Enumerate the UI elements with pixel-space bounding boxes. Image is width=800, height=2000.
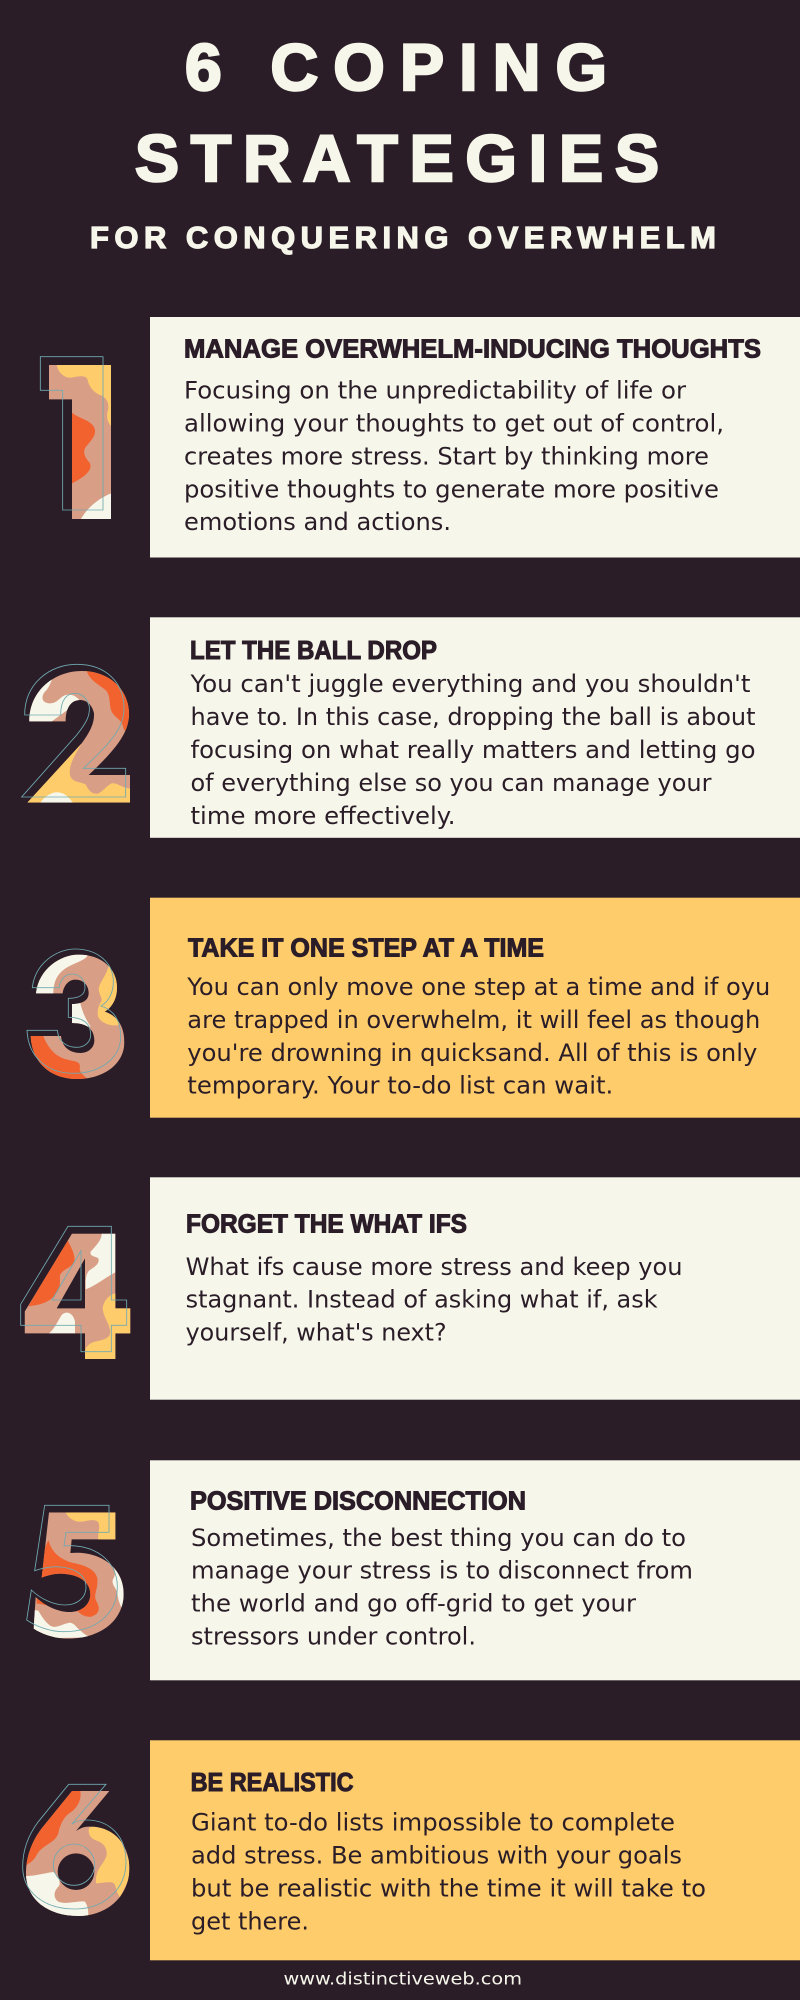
body text: strategy 6 [191, 1809, 706, 1936]
panel: strategy 3 [150, 898, 800, 1118]
body text: strategy 6: get there. [191, 1908, 309, 1936]
panel: strategy 1 [150, 317, 800, 558]
heading: strategy 1: MANAGE OVERWHELM-INDUCING THOUGHTS [184, 336, 761, 364]
body text: strategy 3: you're drowning in quicksand. All of this is only [187, 1039, 757, 1067]
numeral 5 [27, 1505, 130, 1643]
body text: strategy 5: Sometimes, the best thing you can do to [191, 1524, 686, 1552]
title [135, 30, 659, 195]
heading: strategy 2: LET THE BALL DROP [190, 637, 437, 665]
subtitle: FOR CONQUERING OVERWHELM [90, 220, 716, 255]
body text: strategy 4: yourself, what's next? [186, 1319, 447, 1347]
numeral 4 [20, 1226, 135, 1363]
numeral 2 [20, 664, 137, 807]
body text: strategy 5: the world and go off-grid to get your [191, 1590, 636, 1618]
numeral 1 [40, 356, 111, 519]
body text: strategy 3 [186, 973, 770, 1100]
body text: strategy 2 [189, 670, 755, 830]
body text: strategy 6: add stress. Be ambitious with your goals [191, 1842, 682, 1870]
body text: strategy 3: temporary. Your to-do list can wait. [187, 1072, 613, 1100]
numeral 6 [20, 1784, 133, 1920]
title: 6 COPING [185, 30, 607, 104]
body text: strategy 6: Giant to-do lists impossible to complete [191, 1809, 675, 1837]
body text: strategy 2: of everything else so you can manage your [190, 769, 712, 797]
body text: strategy 6: but be realistic with the time it will take to [191, 1875, 706, 1903]
panel: strategy 4 [150, 1177, 800, 1400]
body text: strategy 5: stressors under control. [191, 1623, 476, 1651]
body text: strategy 1: allowing your thoughts to get out of control, [184, 410, 724, 438]
body text: strategy 1 [184, 376, 724, 536]
heading: strategy 5: POSITIVE DISCONNECTION [190, 1487, 526, 1515]
numeral 3 [26, 948, 124, 1079]
panel: strategy 2 [150, 617, 800, 838]
body text: strategy 5 [191, 1524, 693, 1651]
body text: strategy 4 [186, 1253, 683, 1347]
body text: strategy 1: emotions and actions. [184, 508, 451, 536]
body text: strategy 2: focusing on what really matters and letting go [190, 736, 756, 764]
body text: strategy 2: time more effectively. [190, 802, 456, 830]
footer url: www.distinctiveweb.com [284, 1970, 522, 1990]
body text: strategy 1: creates more stress. Start by thinking more [184, 442, 709, 470]
body text: strategy 5: manage your stress is to disconnect from [191, 1557, 693, 1585]
panel: strategy 6 [150, 1740, 800, 1960]
body text: strategy 3: are trapped in overwhelm, it will feel as though [187, 1006, 760, 1034]
panel: strategy 5 [150, 1460, 800, 1680]
title: STRATEGIES [135, 121, 659, 195]
heading: strategy 6: BE REALISTIC [191, 1769, 354, 1797]
body text: strategy 1: Focusing on the unpredictability of life or [184, 376, 686, 404]
body text: strategy 2: You can't juggle everything and you shouldn't [189, 670, 750, 698]
body text: strategy 4: What ifs cause more stress and keep you [186, 1253, 683, 1281]
body text: strategy 2: have to. In this case, dropping the ball is about [190, 703, 756, 731]
heading: strategy 3: TAKE IT ONE STEP AT A TIME [188, 935, 544, 963]
body text: strategy 1: positive thoughts to generate more positive [184, 476, 719, 504]
body text: strategy 4: stagnant. Instead of asking what if, ask [186, 1286, 658, 1314]
heading: strategy 4: FORGET THE WHAT IFS [186, 1211, 467, 1239]
body text: strategy 3: You can only move one step at a time and if oyu [186, 973, 770, 1001]
